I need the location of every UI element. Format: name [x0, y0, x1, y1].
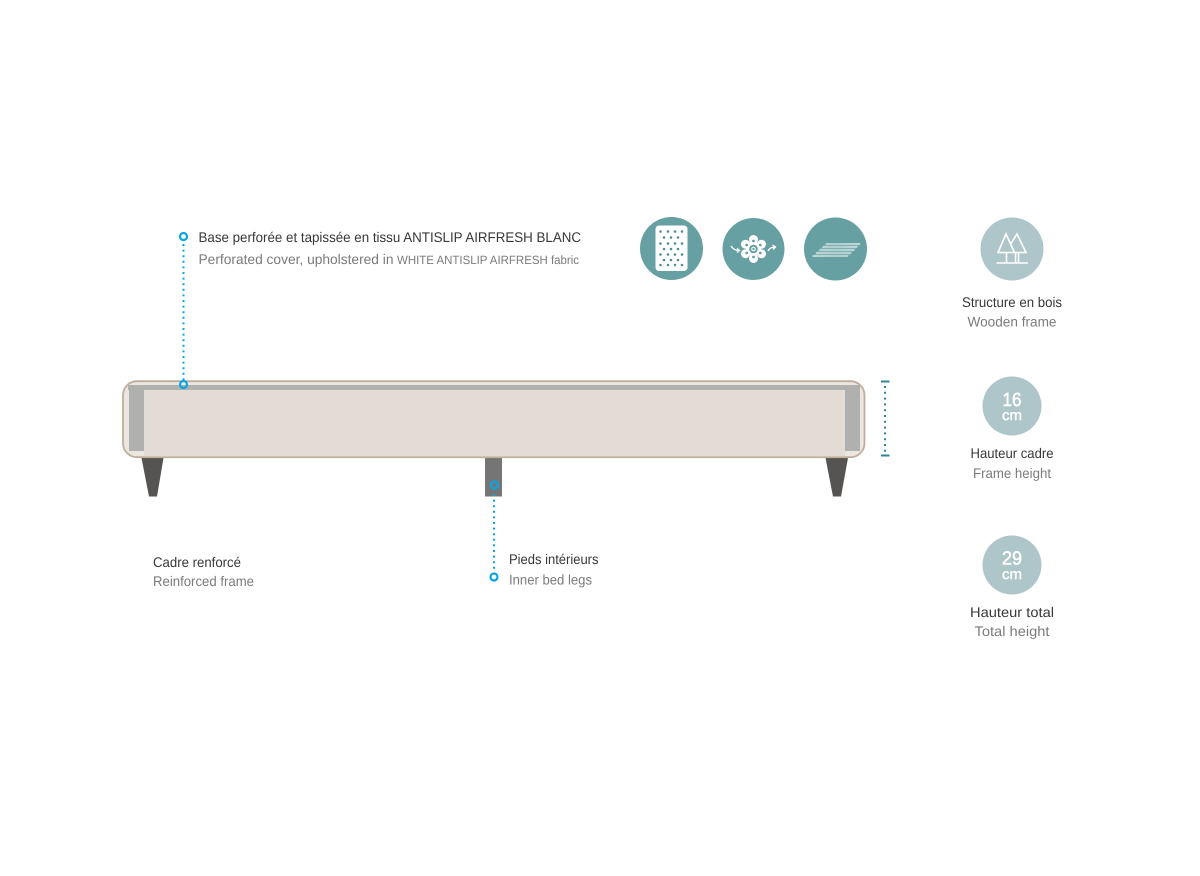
label: total height — [970, 604, 1054, 639]
icon: perforated mattress — [640, 217, 703, 280]
centre leg — [485, 458, 502, 496]
badge: 16 cm: cm — [1002, 408, 1022, 424]
bed base diagram — [123, 381, 864, 496]
icon: airflow flower — [722, 218, 784, 280]
callout: inner legs — [490, 482, 498, 580]
badge: 29 cm: cm — [1002, 567, 1022, 583]
label: perforated base: Base perforée et tapissée en tissu ANTISLIP AIRFRESH BLANC — [198, 229, 581, 245]
label: reinforced frame: Cadre renforcé — [153, 554, 241, 570]
label: inner legs — [509, 551, 598, 588]
label: reinforced frame — [153, 554, 254, 589]
left leg — [142, 458, 164, 496]
label: frame height: Hauteur cadre — [970, 445, 1054, 461]
frame inner panel — [144, 390, 845, 456]
label: total height: Hauteur total — [970, 604, 1054, 620]
icon: wooden structure — [980, 218, 1044, 280]
callout: perforated base — [180, 233, 187, 388]
label: wooden structure: Wooden frame — [968, 314, 1057, 330]
label: total height: Total height — [974, 623, 1050, 639]
label: frame height — [970, 445, 1054, 481]
badge: 29 cm — [982, 536, 1042, 594]
reinforced frame band — [128, 385, 860, 451]
badge: 16 cm — [982, 376, 1042, 436]
label: reinforced frame: Reinforced frame — [153, 573, 254, 589]
label: perforated base: WHITE ANTISLIP AIRFRESH fabric — [397, 253, 579, 267]
frame outer — [123, 381, 864, 457]
label: inner legs: Inner bed legs — [509, 572, 592, 588]
icon: layered slats — [804, 218, 867, 280]
label: frame height: Frame height — [973, 465, 1051, 481]
label: inner legs: Pieds intérieurs — [509, 551, 598, 567]
badge: 16 cm: 16 — [1002, 390, 1022, 411]
label: wooden structure: Structure en bois — [962, 294, 1062, 310]
frame height marker — [881, 382, 890, 456]
right leg — [826, 458, 848, 496]
label: wooden structure — [962, 294, 1062, 330]
badge: 29 cm: 29 — [1002, 548, 1022, 570]
label: perforated base: Perforated cover, upholstered in — [198, 251, 394, 267]
label: perforated base — [198, 229, 581, 267]
